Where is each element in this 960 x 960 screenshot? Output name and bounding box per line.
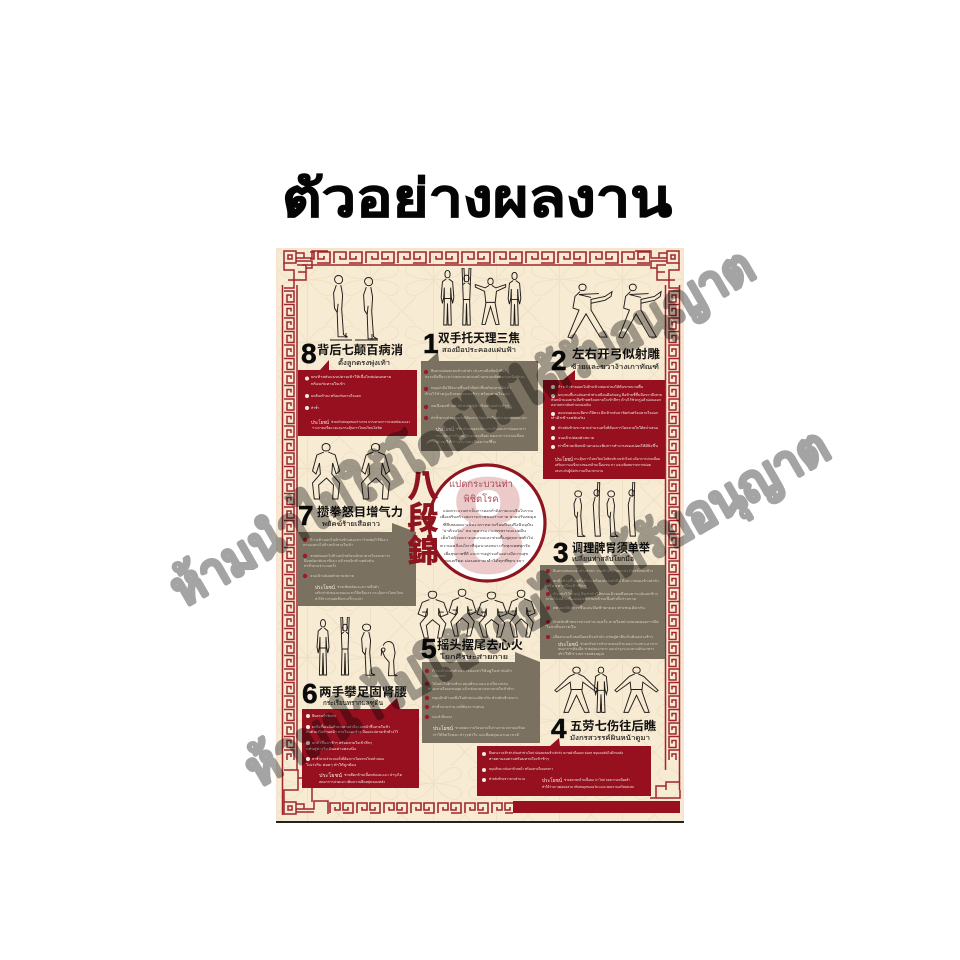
panel 2: ก้าวเท้าซ้ายออกไปด้านข้างย่อเข่าลงให้ต้นขาขนานพื้น bbox=[558, 384, 644, 389]
panel 2: กระตุ้นการไหลเวียนโลหิตบริเวณหัวไหล่ แก้อาการปวดเมื่อย bbox=[574, 456, 660, 462]
bullet markers panel 7 bbox=[303, 538, 307, 578]
panel 6: กลับสู่ท่าเริ่มต้นอย่างสงบนิ่ง bbox=[306, 746, 357, 751]
vertical red chinese title: 錦 bbox=[408, 526, 438, 571]
main title: ตัวอย่างผลงาน bbox=[282, 170, 673, 228]
panel 6: ประโยชน์ bbox=[319, 772, 343, 779]
panel 8: ยกส้นเท้าลง พร้อมกับหายใจออก bbox=[311, 394, 361, 398]
headings: step 8: ตั้งลูกตรงพุ่งเท้า bbox=[338, 358, 390, 367]
panel 5: ประโยชน์ bbox=[433, 725, 454, 732]
headings: step 1: 1 bbox=[423, 328, 439, 359]
circle body text: เพื่อสุขภาพที่ดี และการอยู่ร่วมกันอย่างมีความสุข bbox=[444, 551, 529, 557]
bullet markers panel 8 bbox=[305, 376, 309, 410]
headings: step 3: 调理脾胃须单举 bbox=[572, 539, 650, 556]
panel 6: ลดอาการปวดเอว เพิ่มความยืดหยุ่นของหลัง bbox=[319, 779, 385, 785]
bullet markers panel 5 bbox=[425, 669, 429, 719]
figures: step 1 bbox=[441, 268, 521, 325]
circle body text: แปดกระบวนท่าเป็นการออกกำลังกายแบบจีนโบราณ bbox=[443, 507, 534, 513]
headings: step 7: 攒拳怒目增气力 bbox=[317, 503, 403, 520]
bullet markers panel 6 bbox=[306, 714, 310, 761]
circle body text: ลดเครียด ผ่อนคลาย ทำได้ทุกที่ทุกเวลา bbox=[444, 558, 524, 564]
panel 2: ทำอีกข้างสลับกัน bbox=[551, 416, 586, 420]
poster sheet bbox=[276, 248, 684, 823]
panel 3: พร้อมหายใจเข้าลึกๆ bbox=[546, 584, 586, 589]
circle body text: ความเคลื่อนไหวที่นุ่มนวลเหมาะกับทุกเพศทุกวัย bbox=[440, 543, 530, 549]
center circle bbox=[429, 449, 545, 603]
panel 2: จบแล้วปล่อยตัวสบาย bbox=[558, 436, 594, 440]
panel 5: โน้มตัวไปด้านซ้าย หมุนศีรษะและเอวเป็นวงกลม bbox=[432, 680, 508, 687]
panel 3: ยกมือซ้ายขึ้นเหนือศีรษะพร้อมหงายฝ่ามือ มือขวากดลงข้างลำตัว bbox=[553, 578, 659, 583]
panel 7: ตามองตรงไปข้างหน้าหายใจเข้า bbox=[303, 543, 353, 547]
panel 2: ทำสลับซ้ายขวาตามจำนวนครั้งที่ต้องการโดยหายใจให้สม่ำเสมอ bbox=[558, 425, 658, 430]
panel 7: ทำให้ร่างกายสดชื่นกระปรี้กระเปร่า bbox=[315, 596, 363, 601]
panel 5: ทำซ้ำตามจำนวนที่ต้องการเสมอ bbox=[432, 704, 484, 709]
figures: step 3 bbox=[574, 482, 635, 536]
panel 1: ช่วยให้ร่างกายแข็งแรงขึ้น bbox=[436, 438, 497, 444]
bullet markers panel 2 bbox=[551, 385, 555, 449]
panel 3: ค้างท่าไว้ชั่วครู่ ยืดลำตัวให้ตรงแล้วลดมือลงมาระดับอกช้าๆ bbox=[553, 591, 658, 597]
panel 8: ประโยชน์ bbox=[311, 419, 329, 426]
figures: step 8 bbox=[330, 275, 378, 340]
panel 3: ไม่กลั้นหายใจ bbox=[544, 624, 576, 629]
panel 1: หงายมือขึ้นระหว่างยกแขนผ่านหน้าอกจนเหยียดตรงเหนือศีรษะ bbox=[425, 374, 525, 379]
panel 7: ก้าวเท้าออกไปด้านข้างย่อเข่า กำหมัดไว้ที่เอว bbox=[310, 537, 388, 542]
panel 4: ยืนตรงวางเท้าห่างกันเท่าช่วงไหล่ ปล่อยแขนข้างลำตัว หงายฝ่ามือออก ค่อยๆ หมุนคอหันไปด้านหลัง bbox=[489, 750, 623, 756]
panel 7 bbox=[298, 523, 416, 606]
panel 2: เสริมความแข็งแรงของกล้ามเนื้อแขน ขา และเพิ่มสมรรถภาพปอด bbox=[555, 461, 651, 467]
vertical red chinese title: 八 bbox=[408, 461, 438, 506]
watermark 1: ห้ามนำไปใช้โดยไม่ได้รับอนุญาต bbox=[160, 235, 765, 620]
panel 1: กระตุ้นการไหลเวียนของเลือด ลดอาการปวดเมื่อย bbox=[436, 433, 524, 439]
panel 1: ช่วยปรับสมดุลอวัยวะภายในและการย่อยอาหาร bbox=[456, 427, 526, 432]
circle body text bbox=[440, 507, 536, 564]
circle heading: แปดกระบวนท่า bbox=[449, 479, 513, 490]
panel 3: ทำให้ร่างกายสมดุล bbox=[558, 652, 604, 657]
bullet markers panel 4 bbox=[482, 752, 486, 782]
panel 1: ทำซ้ำตามจำนวนครั้งที่ต้องการโดยหายใจสม่ำเสมอตลอดเวลา bbox=[431, 415, 527, 420]
panel 2: คลายท่ากลับตำแหน่งเดิม bbox=[551, 403, 591, 407]
headings: step 1 bbox=[423, 328, 520, 359]
panel 6: ก้มตัวลงไปด้านหน้า หายใจออกช้าๆ มือแตะปลายเท้าค้างไว้ bbox=[306, 729, 398, 735]
headings: step 2 bbox=[551, 345, 660, 376]
headings: step 7: พยัคฆ์ร้ายเสือดาว bbox=[322, 520, 380, 528]
panel 3: ประโยชน์ bbox=[558, 641, 579, 648]
figures: step 2 bbox=[568, 284, 661, 338]
headings: step 4: 五劳七伤往后瞧 bbox=[570, 717, 656, 734]
panel 3: ยืนตรงปล่อยแขนข้างลำตัว วางเท้าห่างกันเท่าช่วงไหล่ทั้งสองข้าง bbox=[553, 568, 653, 573]
panel 7: ทำซ้ำตามจำนวนครั้ง bbox=[304, 563, 336, 568]
panel 3: หายใจออกพร้อมผ่อนคลายกล้ามเนื้อทั่วทั้งร่างกาย bbox=[546, 596, 636, 601]
panel 2: ท่านี้ช่วยเปิดหน้าอกและเพิ่มการทำงานของปอดให้ดียิ่งขึ้น bbox=[558, 443, 659, 448]
panel 8: ยกเท้าสลับแบบปลายเท้าให้เนื้อไหล่ผ่อนคลาย bbox=[311, 374, 391, 379]
headings: step 5: 5 bbox=[421, 633, 437, 664]
headings: step 3: 3 bbox=[553, 537, 569, 568]
panel 5 bbox=[422, 652, 540, 743]
panel 5: พร้อมหายใจออกจนสุด แล้วกลับมาตรงกลางหายใจเข้าช้าๆ bbox=[428, 687, 514, 692]
panel 3: ทำสลับซ้ายขวาตามจำนวนครั้ง หายใจสม่ำเสมอตลอดการฝึก bbox=[553, 619, 659, 624]
headings: step 3: เปลี่ยนท่าสลับโยกมือ bbox=[572, 554, 634, 563]
vertical red chinese title: 段 bbox=[408, 493, 438, 538]
panel 6: ช่วยยืดกล้ามเนื้อหลังและเอว บำรุงไต bbox=[344, 772, 402, 778]
circle body text: เต็มไปด้วยความงดงามและช่วยฟื้นฟูสุขภาพทั่วไป bbox=[441, 534, 534, 541]
panel 8: ช่วยปรับสมดุลของร่างกาย บรรเทาอาการปวดหลังและเอว bbox=[331, 420, 410, 425]
panel 5: จบแล้วยืนตรง bbox=[432, 714, 452, 719]
headings: step 2: ซ้ายและขวาง้างเกาทัณฑ์ bbox=[571, 363, 659, 371]
panel 6 bbox=[302, 698, 419, 788]
panel 4: ทำสลับซ้ายขวาตามจำนวน bbox=[489, 777, 526, 781]
panel 2: ยกแขนขึ้นระดับอกทำท่าเหมือนดึงคันธนู มือซ้ายชี้ขึ้นมือขวาดึงสาย bbox=[558, 392, 662, 397]
panel 8: ร่างกายแข็งแรงและกระตุ้นการไหลเวียนโลหิต bbox=[312, 424, 382, 431]
panel 3: เมื่อครบแล้วลดมือลงข้างลำตัว กลับสู่ท่ายืนเริ่มต้นอย่างช้าๆ bbox=[553, 634, 653, 640]
panel 2: ประโยชน์ bbox=[555, 456, 573, 463]
headings: step 7 bbox=[298, 500, 403, 531]
panel 8 bbox=[298, 360, 417, 436]
figures: step 6 bbox=[317, 617, 397, 676]
circle body text: "ปาต้วนจิ่น" หมายความว่าแพรพรรณแปดผืน bbox=[442, 528, 527, 533]
headings: step 4 bbox=[551, 713, 656, 744]
big pink 8: 8 bbox=[450, 449, 526, 603]
panel 6: ทำซ้ำตามจำนวนครั้งที่ต้องการโดยหายใจสม่ำเสมอ bbox=[312, 756, 384, 761]
headings: step 6 bbox=[302, 678, 407, 709]
panel 5: ช่วยลดความร้อนภายในร่างกาย คลายเครียด bbox=[455, 726, 525, 730]
center circle: พิชิตโรค bbox=[464, 493, 498, 505]
watermark 2: ห้ามนำไปใช้โดยไม่ได้รับอนุญาต bbox=[234, 415, 840, 800]
panel 2: ลดแขนลงและยืดขาให้ตรง ดึงเท้ากลับมาชิดกันพร้อมหายใจออก bbox=[558, 410, 658, 415]
panel 5: ก้าวเท้าออกด้านข้างย่อเข่าให้อยู่ในท่านั่งม้า bbox=[432, 668, 512, 673]
headings: step 6: 6 bbox=[302, 678, 318, 709]
panel 3: สลับยกมือขวาขึ้นและมือซ้ายกดลง ทำเช่นเดียวกัน bbox=[553, 605, 646, 610]
headings: step 2: 2 bbox=[551, 345, 567, 376]
headings: step 8: 8 bbox=[301, 338, 317, 369]
panel 3: ลดอาการท้องอืด ช่วยย่อยอาหาร และบำรุงระบบทางเดินอาหาร bbox=[558, 646, 654, 652]
circle body text: เพื่อเสริมสร้างสมรรถภาพของร่างกาย ช่วยปรับสมดุล bbox=[440, 514, 536, 520]
panel 3 bbox=[540, 565, 665, 659]
panel 7: เสริมกำลังของแขนและขาให้แข็งแรง กระตุ้นการไหลเวียน bbox=[315, 589, 404, 596]
panel 1: หมุนฝ่ามือให้หงายขึ้นแล้วยืดตัวขึ้นพร้อมหายใจเข้า bbox=[431, 385, 511, 391]
panel 7: ดึงหมัดกลับมาที่เอว แล้วชกอีกข้างสลับกัน bbox=[304, 558, 375, 563]
headings: step 6: กระเรียนทรากมลฑูติน bbox=[323, 699, 384, 707]
panel 6: ยืนตรงเท้าชิดกัน bbox=[312, 713, 337, 718]
headings: step 5: โยกศีรษะส่ายกาย bbox=[440, 653, 508, 661]
headings: step 8 bbox=[301, 338, 403, 369]
panel 2: เหมาะกับผู้นั่งทำงานเป็นเวลานาน bbox=[555, 467, 604, 473]
panel 1: ยืนตรงปล่อยแขนข้างลำตัว ประสานมือที่หน้าท้อง bbox=[431, 368, 506, 373]
panel 1: ค้างไว้ชั่วครู่แล้วลดแขนลงช้าๆ พร้อมหายใจออก bbox=[425, 391, 510, 397]
panel 1 bbox=[421, 352, 538, 451]
panel 4: ประโยชน์ bbox=[542, 777, 563, 784]
vertical red chinese title bbox=[408, 461, 438, 571]
headings: step 4: 4 bbox=[551, 713, 567, 744]
panel 5: หมุนอีกด้านหนึ่งในลักษณะเดียวกัน ทำสลับซ้ายขวา bbox=[432, 695, 518, 701]
headings: step 1: 双手托天理三焦 bbox=[438, 329, 520, 346]
headings: step 1: สองมือประคองแผ่นฟ้า bbox=[442, 346, 516, 354]
headings: step 5: 摇头摆尾去心火 bbox=[437, 636, 523, 653]
panel 5: วางมือบนเข่า bbox=[432, 673, 446, 678]
panel 4 bbox=[477, 738, 651, 796]
panel 3: ช่วยปรับการทำงานของม้ามและกระเพาะอาหาร bbox=[580, 642, 658, 646]
headings: step 4: มังกรสวรรค์ผินหน้าดูมา bbox=[570, 734, 650, 742]
panel 4: ช่วยคลายกล้ามเนื้อคอ บ่า ไหล่ ลดความเหนื่อยล้า bbox=[564, 777, 630, 782]
panel 6: ยกมือขึ้นเหนือศีรษะหงายฝ่ามือ เงยหน้าขึ้นหายใจเข้า bbox=[312, 724, 390, 729]
panel 2: หันหน้ามองตามมือซ้ายพร้อมหายใจเข้าลึกๆ ค้างไว้ชั่วครู่แล้วผ่อนออก bbox=[551, 397, 661, 403]
headings: step 7: 7 bbox=[298, 500, 314, 531]
panel 4: หมุนศีรษะกลับมาข้างหน้า พร้อมหายใจออกยาว bbox=[489, 767, 553, 772]
panel 1: ประโยชน์ bbox=[436, 426, 454, 433]
panel 4: ทำให้ร่างกายผ่อนคลาย ปรับสมดุลของอวัยวะและลดความเครียดสะสม bbox=[542, 785, 634, 790]
headings: step 3 bbox=[553, 537, 650, 568]
figures: step 7 bbox=[312, 444, 390, 499]
bullet markers panel 1 bbox=[424, 370, 428, 420]
headings: step 6: 两手攀足固肾腰 bbox=[319, 683, 407, 700]
bullet markers panel 3 bbox=[546, 569, 550, 639]
panel 7: จบแล้วปล่อยตัวตามสบาย bbox=[310, 574, 354, 578]
panel 2 bbox=[543, 370, 665, 479]
figures: step 4 bbox=[555, 667, 658, 712]
panel 6: ไม่เร่งรีบ ค่อยๆ ทำให้ถูกต้อง bbox=[305, 763, 357, 768]
panel 7: ประโยชน์ bbox=[315, 584, 336, 591]
panel 8: พร้อมกับหายใจเข้า bbox=[311, 382, 345, 386]
headings: step 5 bbox=[421, 633, 523, 664]
panel 7: ช่วยเพิ่มพลังและความตื่นตัว bbox=[337, 584, 379, 589]
figures: step 5 bbox=[418, 589, 535, 638]
headings: step 8: 背后七颠百病消 bbox=[317, 341, 403, 358]
decorative red meander border bbox=[282, 250, 680, 815]
bottom red bar bbox=[513, 801, 680, 813]
circle body text: ที่สืบทอดมาเป็นเวลาหลายร้อยปีจนถึงปัจจุบัน bbox=[443, 521, 534, 528]
panel 7: ชกหมัดออกไปข้างหน้าพร้อมเบิกตาหายใจออกยาวๆ bbox=[310, 554, 390, 559]
headings: step 2: 左右开弓似射雕 bbox=[572, 345, 660, 362]
panel 4: สายตามองตามพร้อมหายใจเข้าช้าๆ bbox=[489, 757, 549, 762]
panel 1: ลดมือลงข้างลำตัวกลับสู่ท่าเริ่มต้นอย่างช้าๆ bbox=[431, 403, 509, 409]
panel 6: ยกตัวขึ้นมาช้าๆ พร้อมหายใจเข้าลึกๆ bbox=[312, 740, 372, 746]
panel 8: ทำซ้ำ bbox=[311, 405, 319, 410]
panel 5: ทำให้จิตใจสงบ บำรุงหัวใจ และยืดหยุ่นเอวและขาดี bbox=[433, 732, 519, 738]
